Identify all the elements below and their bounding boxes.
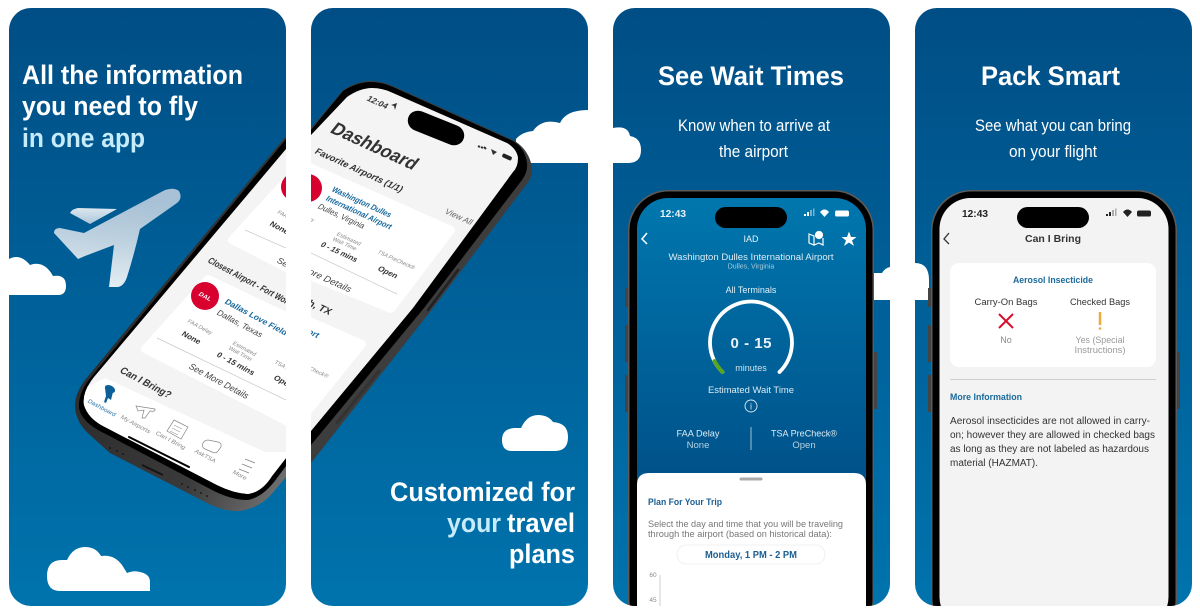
status bar: 12:43 [660,209,686,220]
icon: cloud top right [516,110,588,163]
bottom sheet: plan for your trip: 60 [649,572,657,579]
status bar [365,94,512,161]
dynamic island [715,207,787,228]
icon: cloud left [613,127,641,163]
card: Dallas Love Field [141,275,286,426]
card: Dallas Love Field: Dallas Love Field Airport [223,297,317,351]
phone: tilted dashboard right half [311,81,532,463]
gauge value: 0 - 15 [730,335,772,352]
card: Dallas continued: TSA PreCheck® [287,357,331,380]
dynamic island [1017,207,1089,228]
card: Dallas Love Field: TSA PreCheck® [273,359,315,385]
icon: cloud [915,263,929,300]
card: favorite airport: FAA Delay [276,210,302,227]
gauge unit: minutes [735,363,767,373]
heading: all the information you need to fly in one app: you need to fly [22,91,198,121]
title: can i bring: Can I Bring [1025,233,1081,245]
panel: customized for your travel plans [311,8,588,606]
stat: FAA delay [676,428,720,451]
phone speaker holes and charging port [109,447,208,497]
card: Dallas Love Field: Wait Time [227,346,253,363]
subheading: know when to arrive [678,117,830,161]
card: Washington Dulles: 0 - 15 mins [319,241,360,264]
card: Washington Dulles: FAA Delay [287,208,316,224]
label: favorite airports: Favorite Airports (1/1) [312,147,405,195]
status bar: 12:43 [962,209,988,220]
stat: TSA PreCheck [771,428,837,451]
card: Dallas Love Field: 0 - 15 mins [215,351,257,377]
card: Dallas continued: Airport [290,320,322,340]
card: Dallas Love Field: Dallas, Texas [215,308,265,339]
label: closest airport: Closest Airport - Fort Worth, TX [206,255,310,316]
bottom sheet: plan for your trip: through the airport (based on historical data): [648,529,832,540]
bottom sheet: plan for your trip [637,473,866,606]
card: favorite airport: None [268,220,292,236]
label: can i bring: Can I Bring? [117,366,173,401]
heading: customized for your travel plans: plans [509,539,575,569]
heading: customized for your travel plans: Customized for [390,477,575,507]
text: description [950,416,1155,469]
card: Washington Dulles: TSA PreCheck® [376,249,417,271]
tab: my airports: My Airports [119,415,152,435]
card: Washington Dulles: Open [376,265,400,280]
stat: TSA PreCheck: TSA PreCheck® [771,428,837,438]
card: Washington Dulles: Washington Dulles [330,185,394,219]
link: view all: View All [443,207,475,227]
stat: FAA delay: None [687,440,709,451]
subheading: see what you can bring: See what you can bring [975,117,1131,135]
icon: info: i [750,402,752,412]
panel: pack smart [915,8,1192,616]
panel: see wait times [613,8,890,616]
subheading: know when to arrive: the airport [719,143,788,161]
card: Dallas Love Field: Estimated [231,341,257,358]
card: favorite airport: See More Details [275,256,342,296]
heading: customized for your travel plans: travel [507,508,575,538]
bottom sheet: plan for your trip: Plan For Your Trip [648,497,722,508]
card: aerosol insecticide [950,263,1156,367]
tab: dashboard [88,385,116,416]
card: aerosol insecticide: Instructions) [1074,345,1126,355]
card: Dallas Love Field: FAA Delay [186,319,213,336]
label: city suffix: Fort Worth, TX [264,280,334,317]
card: Washington Dulles: Estimated [335,232,362,247]
card: aerosol insecticide: Checked Bags [1070,297,1130,308]
icon: cloud right [874,267,890,300]
text: description: on; however they are allowed in checked bags [950,430,1155,441]
icon: back chevron [642,233,647,244]
phone: airport wait time [625,190,877,616]
heading: customized for your travel plans: your [447,508,501,538]
text: airport name: Washington Dulles International Airport [668,252,834,263]
text: estimated wait time: Estimated Wait Time [708,385,794,396]
tab bar background [84,378,286,494]
text: all terminals: All Terminals [726,285,777,295]
tab: more [232,458,256,480]
card: Dallas Love Field: See More Details [187,361,252,401]
card: favorite airport [228,176,286,272]
card: Dallas Love Field: DAL [197,291,213,303]
subheading: see what you can bring: on your flight [1009,143,1097,161]
card: aerosol insecticide: No [1000,335,1012,345]
phone: tilted dashboard left half [74,136,286,512]
dynamic island [408,110,464,146]
status bar [962,208,1151,220]
gauge: wait time [710,302,792,372]
stat: TSA PreCheck: Open [792,440,816,451]
text: description: Aerosol insecticides are not allowed in carry- [950,416,1150,427]
tab: can i bring [154,420,188,451]
card: Washington Dulles: Wait Time [331,237,358,252]
icon: cloud left [9,257,66,295]
label: more information: More Information [950,392,1022,403]
icon: airplane [54,189,181,287]
bottom sheet: plan for your trip: Monday, 1 PM - 2 PM [705,549,797,561]
bottom sheet: plan for your trip: 45 [649,597,657,604]
bottom sheet: plan for your trip: Select the day and time that you will be traveling [648,519,843,530]
tab: dashboard: Dashboard [86,399,117,418]
card: Washington Dulles [287,165,451,309]
status bar: 12:04 [365,94,391,111]
text: description: material (HAZMAT). [950,458,1038,469]
tab: ask tsa [193,440,221,464]
heading: all the information you need to fly in one app: All the information [22,60,243,90]
card: Dallas Love Field: None [180,330,204,346]
title: dashboard: Dashboard [326,119,423,174]
status bar [660,208,849,217]
heading: customized for your travel plans [390,477,575,569]
heading: see wait times: See Wait Times [658,61,844,91]
panel: all the information [9,8,286,606]
icon: map pin [809,232,823,245]
card: Washington Dulles: More Details [298,264,354,295]
icon: cloud bottom [47,547,150,591]
text: airport location: Dulles, Virginia [728,264,774,270]
tab: ask tsa: AskTSA [193,449,217,464]
phone: can i bring [928,190,1180,616]
label: IAD: IAD [743,234,759,244]
card: Dallas Love Field: Open [272,374,296,390]
tab: more: More [231,470,248,482]
card: Washington Dulles: International Airport [324,194,395,231]
icon: star [842,232,856,246]
divider [950,378,1156,380]
home indicator [129,437,189,467]
card: aerosol insecticide: Carry-On Bags [974,297,1038,308]
divider [750,427,752,450]
stat: FAA delay: FAA Delay [676,428,720,438]
card: aerosol insecticide: Aerosol Insecticide [1013,275,1093,286]
heading: pack smart: Pack Smart [981,61,1120,91]
icon: cloud lower [502,415,568,451]
icon: back chevron [944,233,949,244]
tab: my airports [119,406,155,435]
card: Dallas continued [311,318,366,414]
subheading: know when to arrive: Know when to arrive at [678,117,830,135]
text: description: as long as they are not labeled as hazardous [950,444,1149,455]
card: Washington Dulles: Dulles, Virginia [316,202,368,230]
card: aerosol insecticide: Yes (Special [1076,335,1124,345]
heading: all the information you need to fly in one app: in one app [22,123,145,153]
icon: info [745,400,757,412]
subheading: see what you can bring [975,117,1131,161]
heading: all the information you need to fly in one app [22,60,243,153]
tab: can i bring: Can I Bring [154,431,187,451]
